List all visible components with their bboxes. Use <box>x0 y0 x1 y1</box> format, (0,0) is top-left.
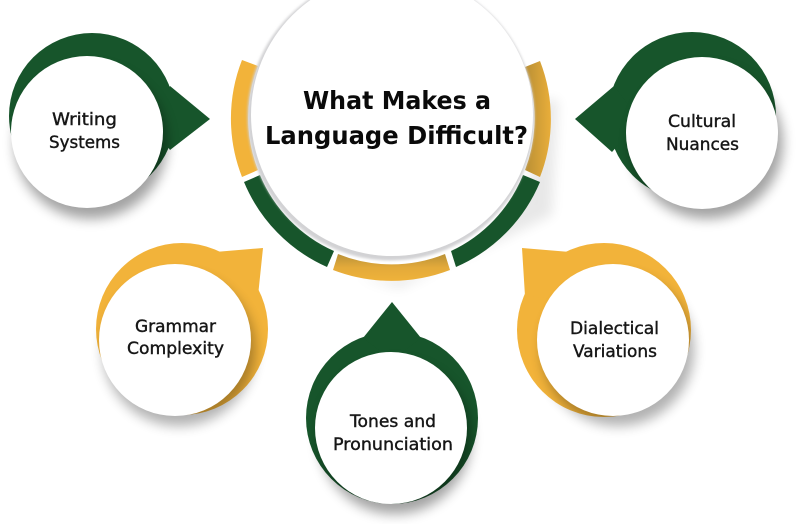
title: Language Difficult? <box>265 121 528 150</box>
icon: green bubble with right pointer <box>9 33 210 199</box>
title: What Makes a <box>303 86 491 115</box>
panel: Dialectical Variations <box>517 243 694 426</box>
label: Complexity <box>127 339 224 358</box>
hub disc <box>248 0 534 260</box>
disc <box>537 264 689 416</box>
label: Tones and <box>349 412 436 431</box>
label <box>333 412 453 454</box>
label: Systems <box>49 133 120 152</box>
label: Writing <box>52 110 117 129</box>
label: Grammar <box>135 317 216 336</box>
shadow <box>319 362 471 514</box>
shadow <box>542 274 694 426</box>
disc <box>99 264 251 416</box>
panel: Writing Systems <box>9 33 210 219</box>
label: Variations <box>573 342 657 361</box>
icon: green bubble with left pointer <box>575 32 776 200</box>
shadow <box>15 67 167 219</box>
panel: central hub <box>231 0 558 288</box>
disc <box>11 56 163 208</box>
ring segment: lower-left green <box>244 175 334 267</box>
icon: green bubble with top pointer <box>306 302 478 504</box>
ring segment: right yellow <box>525 61 551 177</box>
ring shadow <box>330 100 558 288</box>
label <box>49 110 120 152</box>
disc <box>315 352 467 504</box>
shadow <box>103 274 255 426</box>
label <box>666 112 739 154</box>
ring segment: left yellow <box>231 60 258 177</box>
panel: Tones and Pronunciation <box>306 302 478 514</box>
label: Pronunciation <box>333 435 453 454</box>
label <box>127 317 224 358</box>
label: Nuances <box>666 135 739 154</box>
icon: yellow bubble with top-left pointer <box>517 243 691 417</box>
label: Dialectical <box>570 319 659 338</box>
label: Cultural <box>668 112 736 131</box>
ring segment: bottom yellow <box>333 254 450 281</box>
title <box>265 86 528 150</box>
panel: Grammar Complexity <box>96 243 268 426</box>
ring segment: lower-right green <box>451 175 540 267</box>
icon: yellow bubble with top-right pointer <box>96 243 268 415</box>
shadow <box>631 67 783 219</box>
disc <box>626 57 778 209</box>
panel: Cultural Nuances <box>575 32 783 219</box>
label <box>570 319 659 361</box>
